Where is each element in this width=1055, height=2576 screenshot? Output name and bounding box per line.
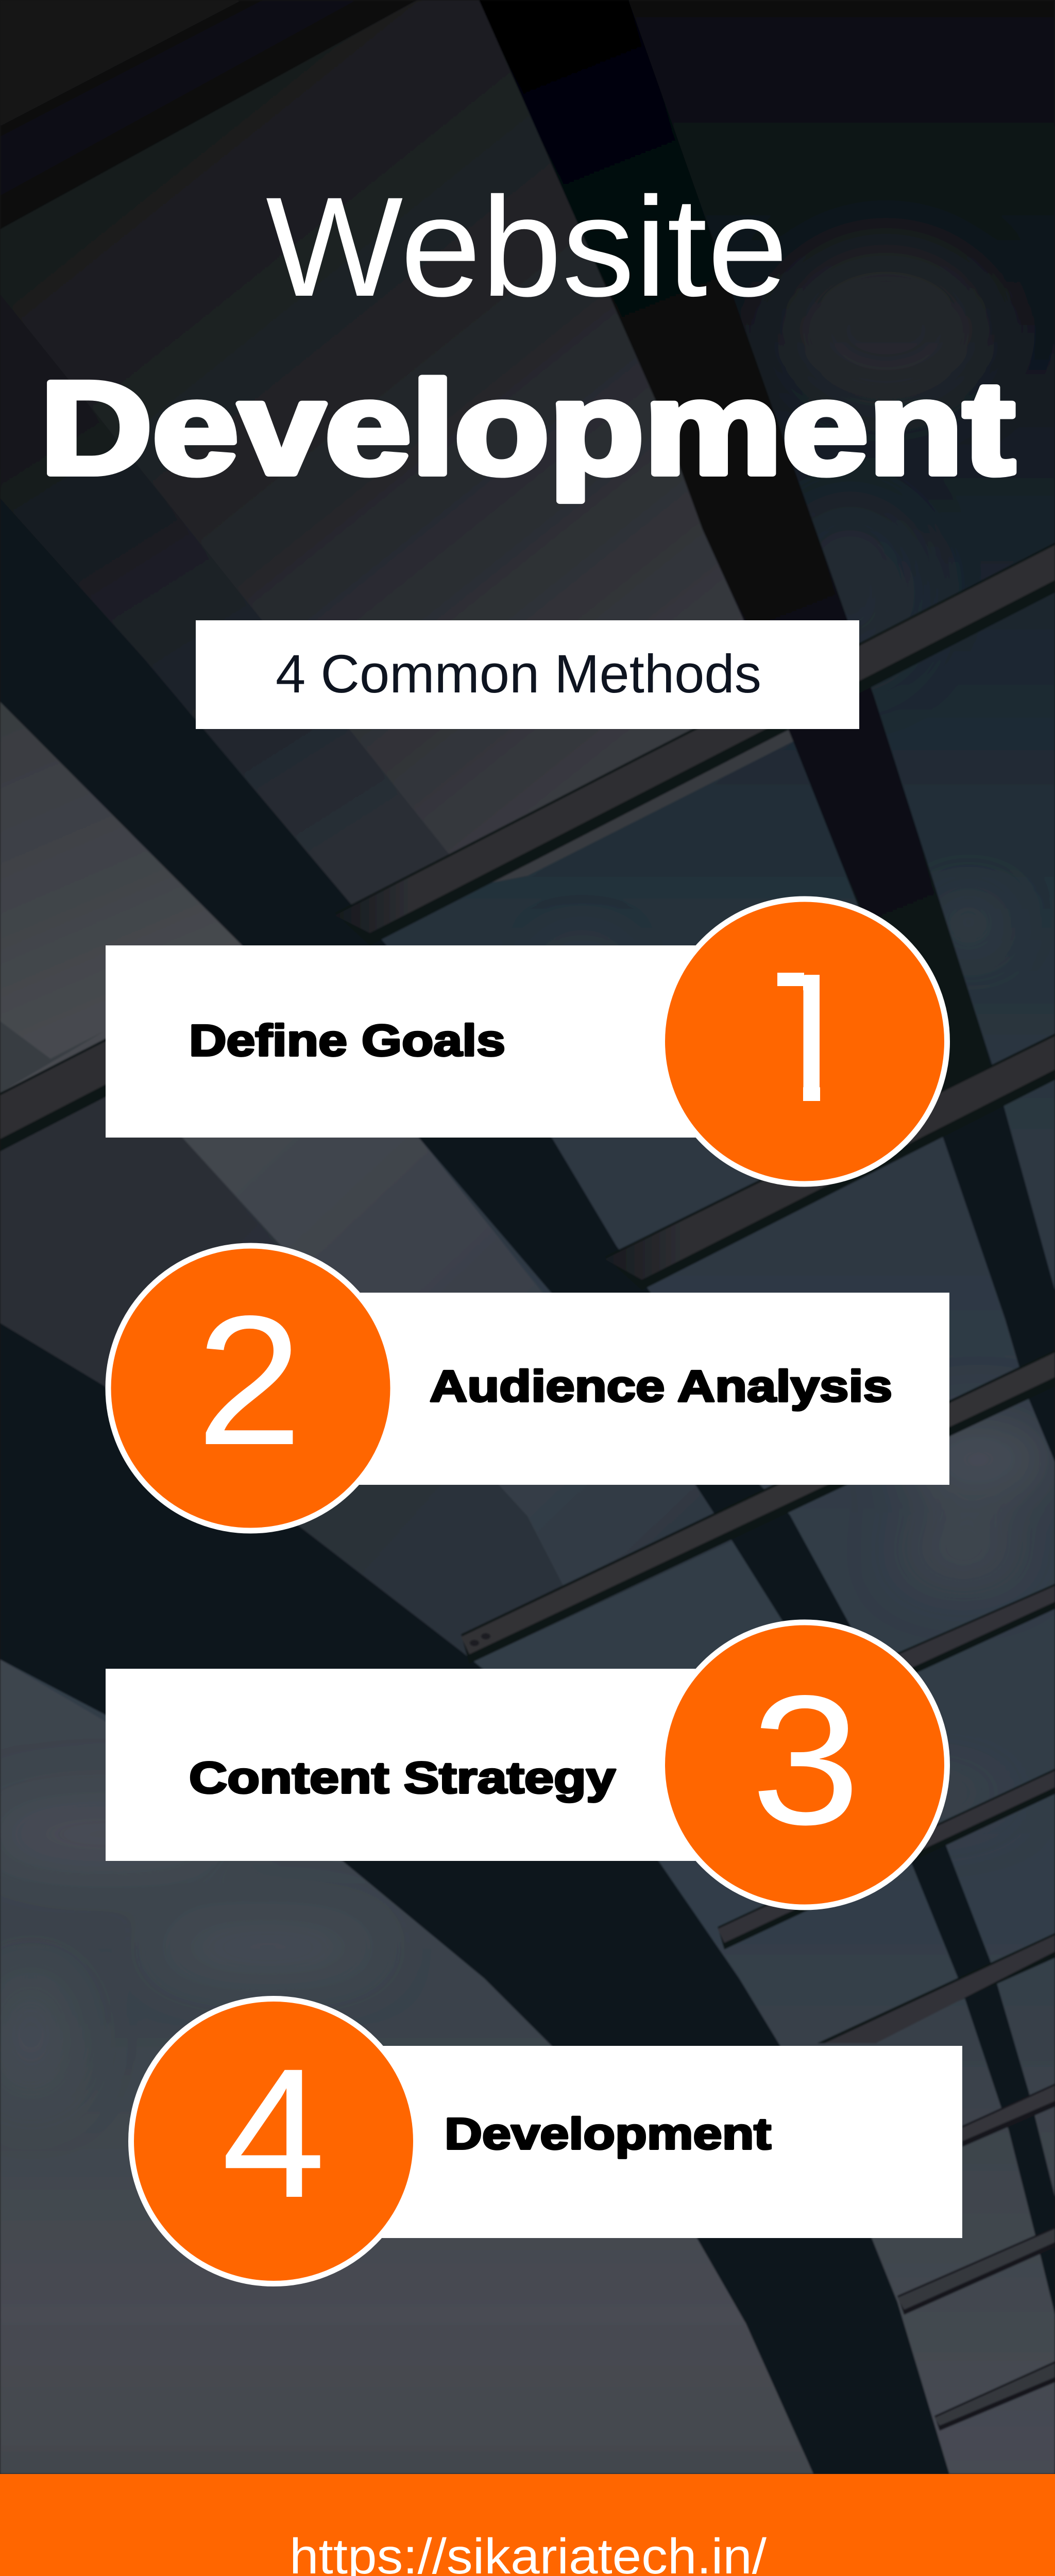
- title line: Development: Development: [40, 354, 1015, 502]
- number: 2: 2: [196, 1277, 302, 1483]
- subtitle box: [196, 620, 859, 729]
- step 2: Audience Analysis: [108, 1246, 949, 1531]
- number: 1: [777, 973, 820, 1101]
- label: step 3: Content Strategy: [189, 1753, 616, 1803]
- label: step 1: Define Goals: [189, 1016, 505, 1065]
- number: 3: 3: [751, 1657, 860, 1863]
- circle: step 4: [131, 1999, 416, 2283]
- step 4: Development: [131, 1999, 962, 2283]
- label: step 2: Audience Analysis: [430, 1362, 892, 1411]
- bar: step 1: [106, 945, 724, 1138]
- circle: step 3: [662, 1622, 947, 1907]
- bar: step 3: [106, 1669, 724, 1861]
- bar: step 2: [335, 1293, 949, 1485]
- number: 4: 4: [222, 2030, 326, 2236]
- circle: step 2: [108, 1246, 393, 1531]
- title: [40, 168, 1015, 502]
- number: 1: 1: [757, 936, 859, 1140]
- label: step 4: Development: [445, 2109, 771, 2159]
- step 1: Define Goals: [106, 899, 947, 1184]
- subtitle box: 4 Common Methods: [276, 644, 761, 704]
- footer band: [0, 2474, 1055, 2576]
- circle: step 1: [662, 899, 947, 1184]
- title line: Website: Website: [266, 168, 788, 326]
- step 3: Content Strategy: [106, 1622, 947, 1907]
- bar: step 4: [361, 2046, 962, 2238]
